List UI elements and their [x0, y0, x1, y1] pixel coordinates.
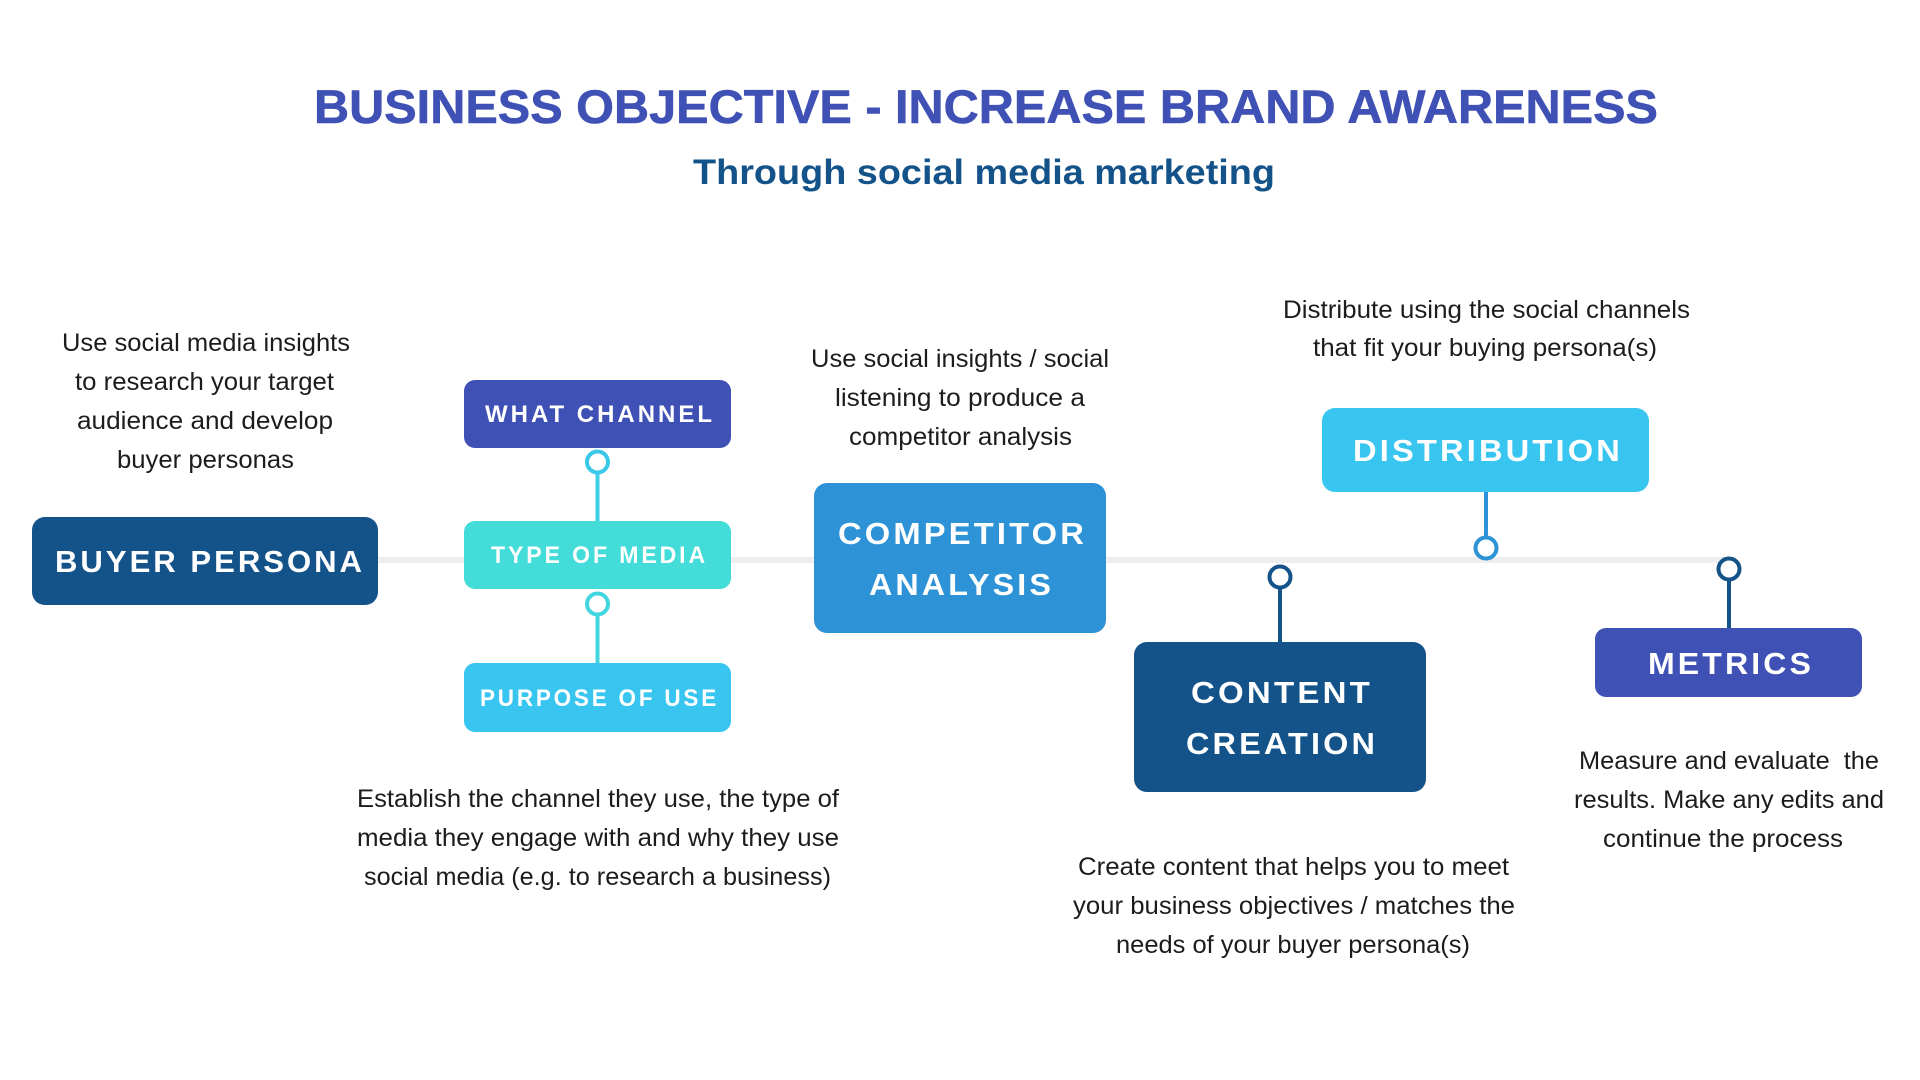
- buyer persona description: [62, 329, 350, 474]
- type of media box: [464, 521, 731, 589]
- buyer persona description: Use social media insights: [62, 329, 350, 357]
- step: content creation: [1073, 566, 1515, 959]
- step: distribution: [1283, 296, 1690, 558]
- distribution description: [1283, 296, 1690, 362]
- competitor analysis box: [814, 483, 1106, 633]
- step: metrics: [1574, 558, 1884, 853]
- metrics connector: [1718, 558, 1740, 629]
- content creation description: needs of your buyer persona(s): [1116, 931, 1470, 959]
- timeline line: [378, 557, 1729, 563]
- metrics description: continue the process: [1603, 825, 1843, 853]
- metrics box: METRICS: [1648, 646, 1814, 681]
- metrics description: Measure and evaluate the: [1579, 747, 1879, 775]
- competitor analysis description: listening to produce a: [835, 384, 1085, 412]
- content creation description: [1073, 853, 1515, 959]
- channel, media and purpose description: media they engage with and why they use: [357, 824, 839, 852]
- content creation box: [1134, 642, 1426, 792]
- distribution connector: [1476, 490, 1496, 558]
- metrics box: [1595, 628, 1862, 697]
- what channel box: WHAT CHANNEL: [485, 401, 715, 428]
- purpose of use box: [464, 663, 731, 732]
- buyer persona description: buyer personas: [117, 446, 294, 474]
- content creation box: CONTENT: [1191, 675, 1373, 710]
- competitor analysis description: [811, 345, 1109, 451]
- metrics description: results. Make any edits and: [1574, 786, 1884, 814]
- competitor analysis description: Use social insights / social: [811, 345, 1109, 373]
- connector: type of media to purpose of use: [587, 594, 608, 664]
- step: competitor analysis: [811, 345, 1109, 633]
- buyer persona box: BUYER PERSONA: [55, 544, 365, 579]
- channel, media and purpose description: Establish the channel they use, the type of: [357, 785, 839, 813]
- content creation connector: [1270, 566, 1290, 643]
- channel, media and purpose description: [357, 785, 839, 891]
- competitor analysis description: competitor analysis: [849, 423, 1072, 451]
- competitor analysis box: ANALYSIS: [869, 567, 1054, 602]
- competitor analysis box: COMPETITOR: [838, 516, 1087, 551]
- channel, media and purpose description: social media (e.g. to research a business): [364, 863, 831, 891]
- subtitle: Through social media marketing: [693, 153, 1275, 192]
- buyer persona box: [32, 517, 378, 605]
- distribution description: that fit your buying persona(s): [1313, 334, 1657, 362]
- distribution box: [1322, 408, 1649, 492]
- content creation box: CREATION: [1186, 726, 1378, 761]
- distribution box: DISTRIBUTION: [1353, 433, 1623, 468]
- title: BUSINESS OBJECTIVE - INCREASE BRAND AWARENESS: [314, 80, 1658, 133]
- what channel box: [464, 380, 731, 448]
- distribution description: Distribute using the social channels: [1283, 296, 1690, 324]
- buyer persona description: audience and develop: [77, 407, 333, 435]
- step: buyer persona: [32, 329, 378, 605]
- content creation description: Create content that helps you to meet: [1078, 853, 1509, 881]
- purpose of use box: PURPOSE OF USE: [480, 685, 719, 712]
- type of media box: TYPE OF MEDIA: [491, 542, 708, 569]
- metrics description: [1574, 747, 1884, 853]
- step: channel, media and purpose group: [357, 380, 839, 891]
- content creation description: your business objectives / matches the: [1073, 892, 1515, 920]
- buyer persona description: to research your target: [75, 368, 334, 396]
- connector: what channel to type of media: [587, 452, 608, 522]
